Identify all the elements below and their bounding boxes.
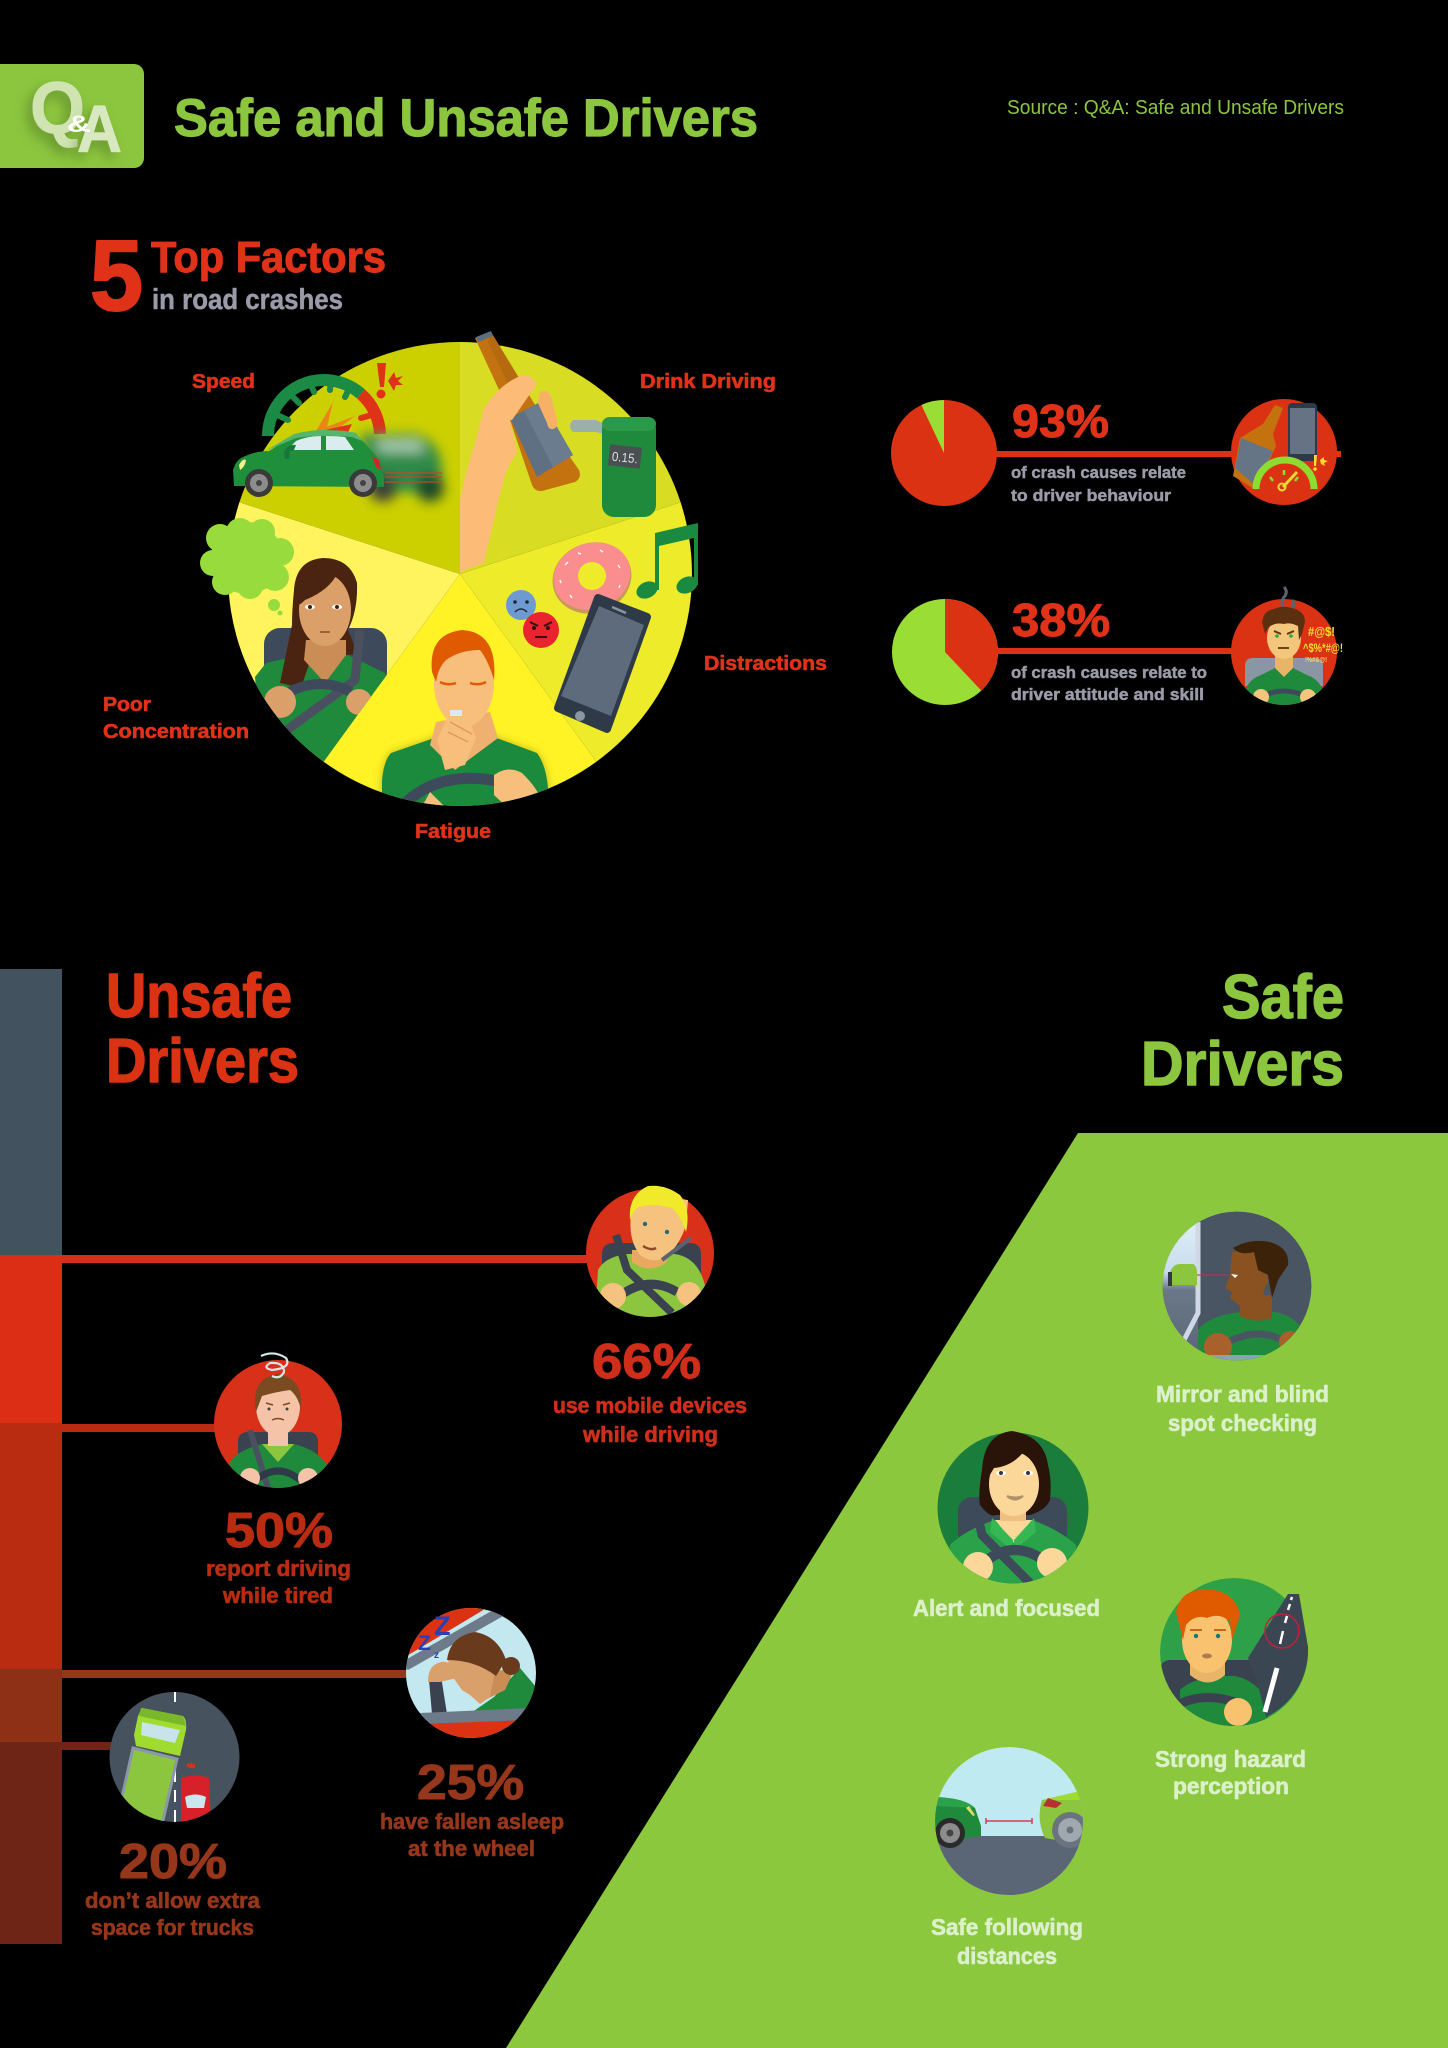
Q&A badge: A <box>77 92 122 167</box>
stat: 93%: 93% <box>1012 395 1109 447</box>
value: 50% <box>225 1504 333 1558</box>
icon: speedometer <box>268 363 403 436</box>
caption: while driving <box>582 1422 718 1447</box>
icon: two cars spaced apart <box>930 1747 1090 1896</box>
safe item: mirror and blind spot checking <box>1156 1212 1329 1436</box>
factor labels <box>103 371 827 843</box>
heading: safe drivers: Drivers <box>1141 1030 1344 1099</box>
icon: thought cloud <box>200 518 294 616</box>
slice: drink driving <box>460 342 681 574</box>
heading: 5 top factors: 5 <box>90 220 143 332</box>
swear text: #@$! <box>1308 624 1335 639</box>
value: 20% <box>119 1835 227 1889</box>
icon: truck and car on road <box>110 1692 240 1825</box>
icon: angry driver <box>1231 587 1343 705</box>
Q&A badge: Q <box>30 68 85 149</box>
pie chart: 93% <box>891 400 997 506</box>
safe item: alert and focused <box>913 1431 1100 1621</box>
heading: 5 top factors: in road crashes <box>152 284 343 316</box>
label: drink driving: Drink Driving <box>640 371 776 393</box>
stat: 25% fallen asleep <box>62 1600 564 1861</box>
icon: driver on phone <box>586 1186 714 1320</box>
stat: 38%: 38% <box>1012 594 1110 646</box>
label: poor concentration: Concentration <box>103 721 249 743</box>
swear text: ^$%*#@! <box>1303 641 1343 655</box>
icon: music note <box>634 523 700 602</box>
value: 25% <box>417 1756 524 1810</box>
connector line <box>995 451 1341 457</box>
icon: driver checking mirror <box>1160 1212 1312 1365</box>
safe item: safe following distances <box>930 1747 1090 1969</box>
icon: sleeping driver <box>406 1608 536 1738</box>
sleep z letters: Z <box>418 1632 431 1655</box>
heading: unsafe drivers: Drivers <box>106 1027 299 1096</box>
icon: hand holding bottle <box>460 331 580 572</box>
panel: 38% attitude and skill <box>892 587 1343 705</box>
icon: tired driver <box>214 1353 342 1490</box>
panel: five factors pie <box>200 331 700 815</box>
pie chart: 38% <box>892 599 998 705</box>
illustration: yawning man with fatigue <box>382 630 548 815</box>
icon: sad and angry faces <box>506 590 559 648</box>
heading: safe drivers: Safe <box>1222 963 1344 1032</box>
smoke wisps <box>1282 587 1294 610</box>
illustration: woman with poor concentration <box>255 558 387 762</box>
label: distractions: Distractions <box>704 653 827 675</box>
slice: fatigue <box>324 574 596 806</box>
label: poor concentration: Poor <box>103 694 151 716</box>
icon: driver watching road <box>1160 1578 1308 1735</box>
caption: Alert and focused <box>913 1595 1100 1621</box>
caption: use mobile devices <box>553 1393 747 1418</box>
title: Safe and Unsafe Drivers <box>174 89 758 148</box>
caption: at the wheel <box>408 1836 535 1861</box>
label: speed: Speed <box>192 371 255 393</box>
slice: poor concentration <box>228 502 460 762</box>
safe item: strong hazard perception <box>1155 1578 1308 1799</box>
stat: 20% space for trucks <box>62 1692 261 1940</box>
icon: smartphone <box>558 598 647 729</box>
caption: distances <box>957 1943 1057 1969</box>
icon: donut <box>542 531 642 625</box>
stat: 66% mobile devices <box>62 1186 747 1447</box>
value: 66% <box>592 1335 701 1389</box>
panel: 93% driver behaviour <box>891 395 1341 506</box>
caption: of crash causes relate <box>1011 463 1186 482</box>
heading: 5 top factors: Top Factors <box>151 233 386 282</box>
caption: Safe following <box>931 1914 1083 1940</box>
Q&A badge: & <box>67 111 91 138</box>
icon: alert driver <box>938 1431 1088 1590</box>
caption: Strong hazard <box>1155 1746 1306 1772</box>
caption: to driver behaviour <box>1011 486 1171 505</box>
caption: report driving <box>206 1556 351 1581</box>
source line: Source : Q&A: Safe and Unsafe Drivers <box>1007 97 1344 119</box>
swear text: !%#&@! <box>1305 657 1327 664</box>
dizzy spiral <box>261 1353 287 1377</box>
icon: speeding car <box>233 430 444 502</box>
icon: bottle, phone and speedometer <box>1231 399 1337 505</box>
caption: space for trucks <box>91 1915 254 1940</box>
sleep z letters: z <box>434 1650 439 1661</box>
caption: Mirror and blind <box>1156 1381 1329 1407</box>
slice: distractions <box>460 502 692 762</box>
caption: have fallen asleep <box>380 1809 564 1834</box>
heading: unsafe drivers: Unsafe <box>106 962 292 1031</box>
caption: perception <box>1173 1773 1289 1799</box>
connector line <box>996 648 1286 654</box>
slice: speed <box>239 342 460 574</box>
sleep z letters: Z <box>434 1611 450 1641</box>
heading: 5 top factors <box>90 220 386 332</box>
icon: breathalyser: 0.15. <box>611 449 639 466</box>
stat: 50% driving tired <box>62 1353 351 1608</box>
label: fatigue: Fatigue <box>415 821 491 843</box>
Q&A badge <box>0 64 144 168</box>
icon: breathalyser <box>570 417 656 517</box>
caption: driver attitude and skill <box>1011 685 1204 704</box>
caption: while tired <box>222 1583 333 1608</box>
caption: of crash causes relate to <box>1011 663 1207 682</box>
caption: spot checking <box>1168 1410 1317 1436</box>
panel: safe drivers background <box>506 1133 1448 2048</box>
caption: don’t allow extra <box>85 1888 261 1913</box>
stacked percentage bar <box>0 969 62 1944</box>
